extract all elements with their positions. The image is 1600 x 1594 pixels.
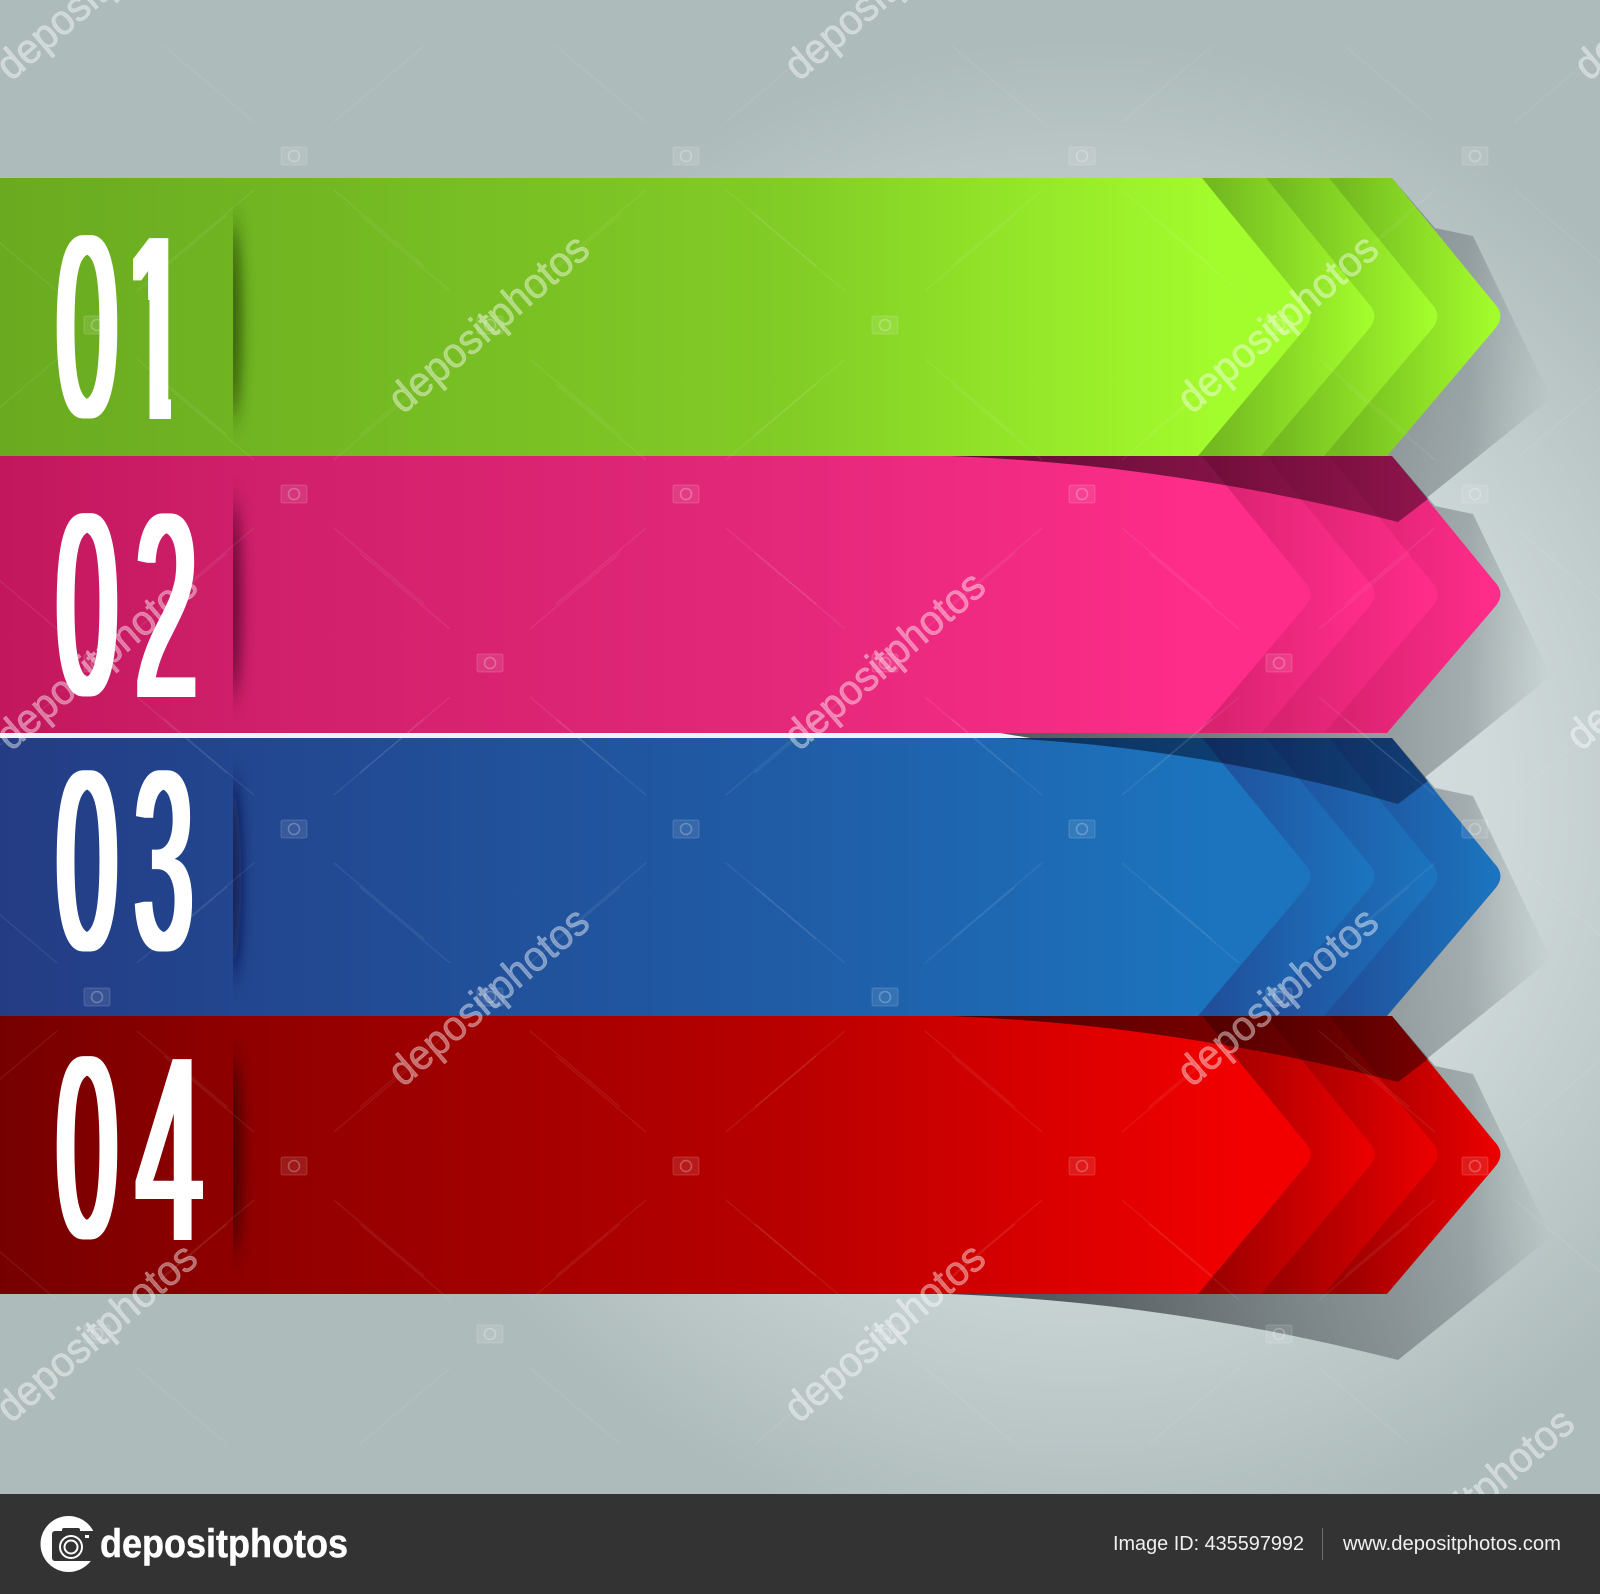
number 04: 0 <box>56 1004 118 1293</box>
banner 04: red arrow <box>0 1016 1500 1294</box>
number 03: 3 <box>135 718 193 1004</box>
white separator line between pink and blue <box>0 733 1040 738</box>
website: www.depositphotos.com <box>1342 1533 1561 1555</box>
number 02 <box>56 460 197 753</box>
banner 01: green arrow <box>0 178 1500 456</box>
banner 02: pink arrow <box>0 456 1500 733</box>
logo: depositphotos <box>100 1522 348 1566</box>
depositphotos diagonal watermarks: depositphotos <box>1363 1398 1583 1594</box>
number 01: 0 <box>56 183 118 472</box>
number 02: 2 <box>136 460 197 753</box>
fold shadow cast on pink banner <box>950 456 1428 522</box>
depositphotos diagonal watermarks: depositphotos <box>774 561 994 759</box>
number 02: 0 <box>56 461 118 750</box>
divider <box>1322 1528 1323 1560</box>
number 01 <box>56 235 171 419</box>
number 01: 1 <box>117 181 194 475</box>
fold shadow cast on red banner <box>950 1016 1428 1082</box>
drop shadows behind arrows <box>950 178 1551 1360</box>
depositphotos diagonal watermarks: depositphotos <box>1167 897 1387 1095</box>
flap crease shadows <box>225 221 241 1255</box>
number 03: 0 <box>56 718 118 1004</box>
depositphotos diagonal watermarks: depositphotos <box>774 1233 994 1431</box>
banner 03: blue arrow <box>0 738 1500 1016</box>
depositphotos diagonal watermarks: depositphotos <box>378 897 598 1095</box>
number 04 <box>56 1003 202 1297</box>
fold shadow cast on blue banner <box>1000 738 1428 804</box>
depositphotos diagonal watermarks: depositphotos <box>378 224 598 422</box>
logo <box>40 1516 348 1572</box>
number 04: 4 <box>137 1003 202 1297</box>
image id: Image ID: 435597992 <box>1113 1533 1304 1555</box>
footer bar <box>0 1494 1600 1594</box>
depositphotos diagonal watermarks: depositphotos <box>1167 224 1387 422</box>
number 03 <box>56 718 193 1004</box>
